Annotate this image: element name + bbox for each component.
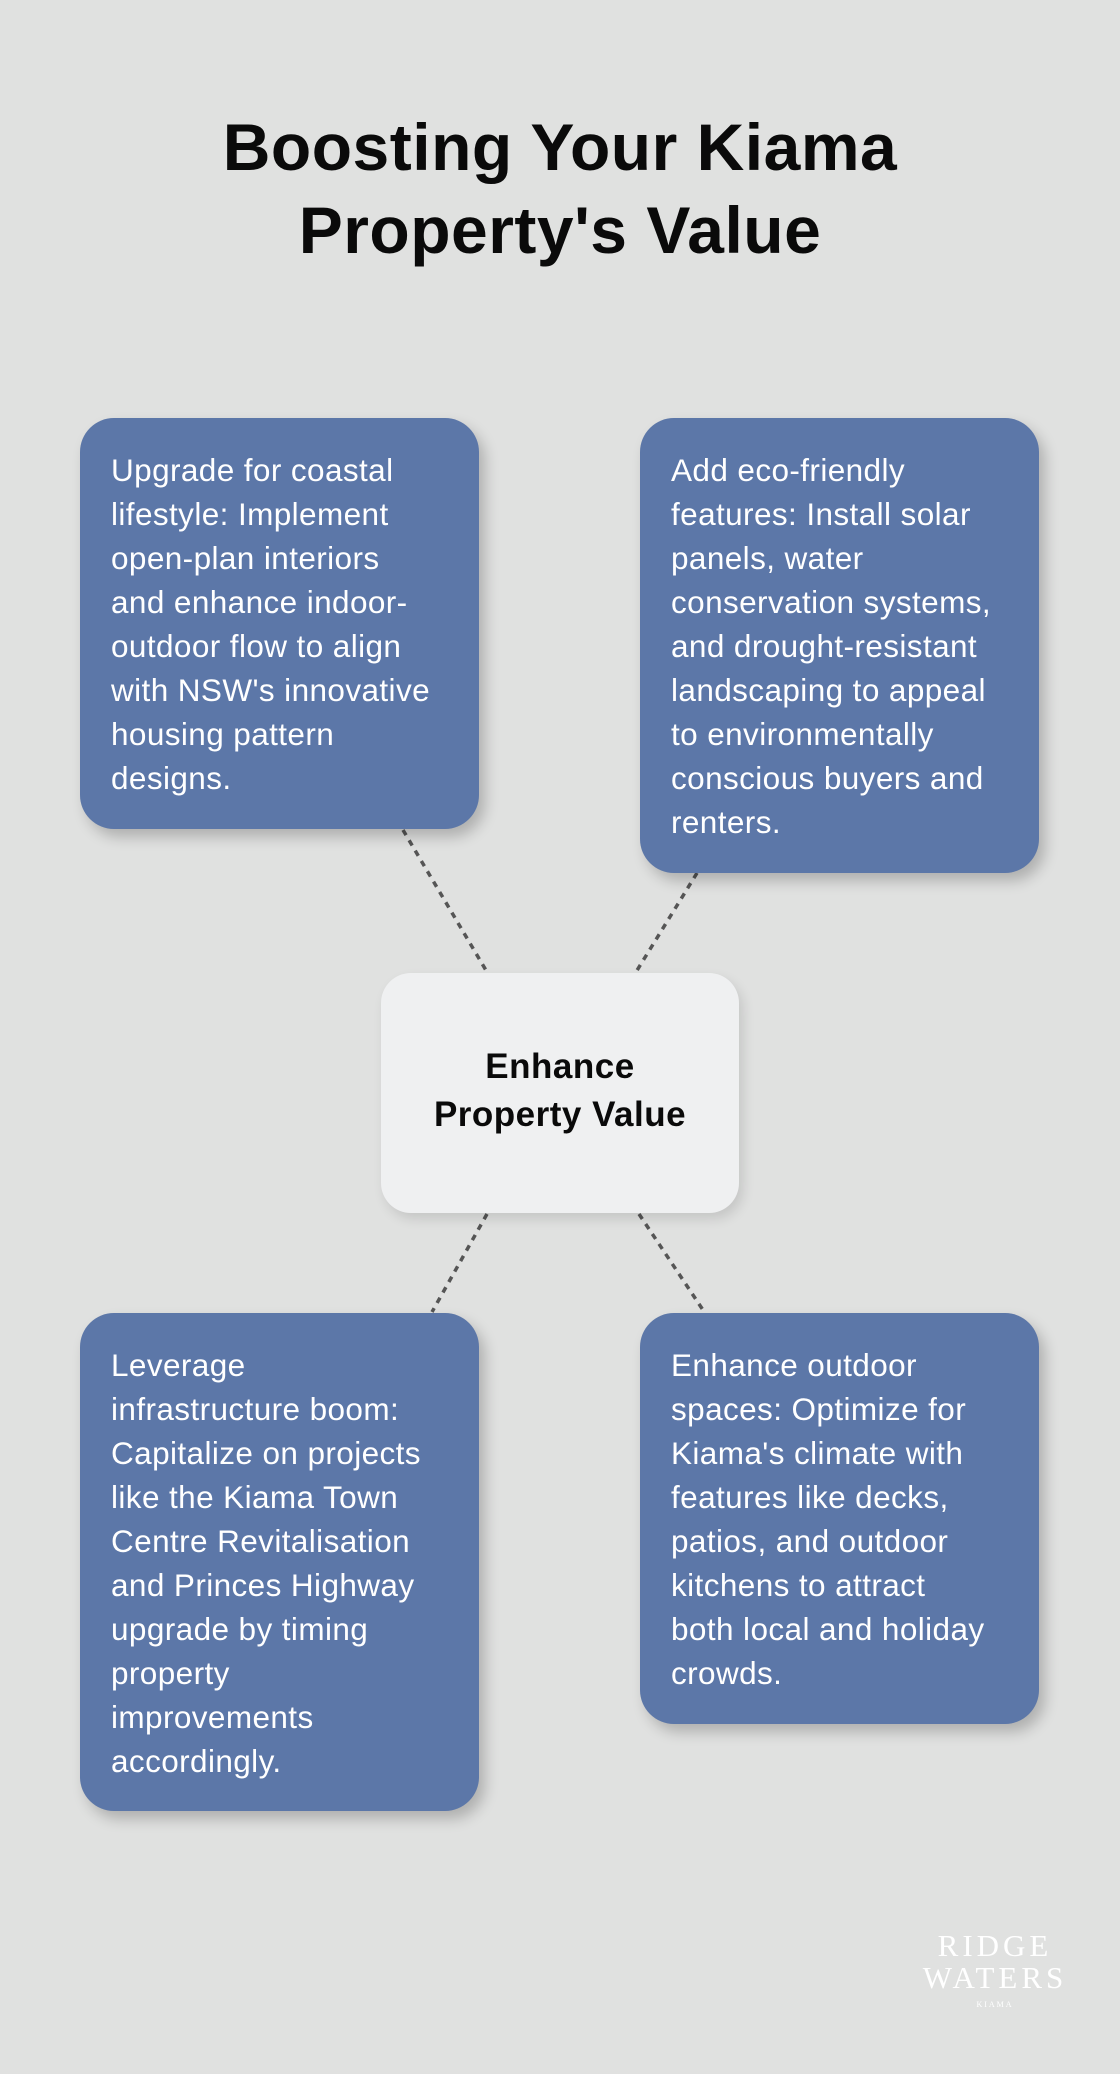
center node: Enhance: [485, 1047, 635, 1086]
logo: [922, 1928, 1067, 2009]
panel: infrastructure: like the Kiama Town: [111, 1479, 398, 1515]
panel: outdoor spaces: features like decks,: [671, 1479, 949, 1515]
panel: outdoor spaces: spaces: Optimize for: [671, 1391, 966, 1427]
logo: KIAMA: [976, 2000, 1014, 2009]
title: Property's Value: [299, 193, 821, 267]
panel: coastal lifestyle: lifestyle: Implement: [111, 496, 389, 532]
panel: infrastructure: accordingly.: [111, 1743, 282, 1779]
panel: eco-friendly: conscious buyers and: [671, 760, 984, 796]
panel: outdoor spaces: patios, and outdoor: [671, 1523, 948, 1559]
center node: [381, 973, 739, 1213]
panel: coastal lifestyle: with NSW's innovative: [111, 672, 430, 708]
center node: Property Value: [434, 1095, 686, 1134]
panel: eco-friendly: [640, 418, 1039, 873]
panel: eco-friendly: conservation systems,: [671, 584, 991, 620]
logo: RIDGE: [938, 1928, 1052, 1963]
panel: infrastructure: infrastructure boom:: [111, 1391, 399, 1427]
title: [223, 110, 898, 267]
panel: coastal lifestyle: Upgrade for coastal: [111, 452, 394, 488]
panel: outdoor spaces: [640, 1313, 1039, 1724]
panel: coastal lifestyle: [80, 418, 479, 829]
panel: infrastructure: Capitalize on projects: [111, 1435, 421, 1471]
title: Boosting Your Kiama: [223, 110, 897, 184]
panel: eco-friendly: landscaping to appeal: [671, 672, 986, 708]
panel: eco-friendly: Add eco-friendly: [671, 452, 905, 488]
panel: eco-friendly: and drought-resistant: [671, 628, 977, 664]
panel: eco-friendly: features: Install solar: [671, 496, 971, 532]
panel: infrastructure: and Princes Highway: [111, 1567, 414, 1603]
panel: coastal lifestyle: housing pattern: [111, 716, 334, 752]
panel: eco-friendly: panels, water: [671, 540, 864, 576]
panel: outdoor spaces: Kiama's climate with: [671, 1435, 963, 1471]
panel: infrastructure: Leverage: [111, 1347, 246, 1383]
panel: outdoor spaces: both local and holiday: [671, 1611, 985, 1647]
panel: infrastructure: Centre Revitalisation: [111, 1523, 410, 1559]
logo: WATERS: [923, 1960, 1067, 1995]
panel: outdoor spaces: Enhance outdoor: [671, 1347, 917, 1383]
panel: coastal lifestyle: and enhance indoor-: [111, 584, 408, 620]
panel: coastal lifestyle: designs.: [111, 760, 232, 796]
panel: outdoor spaces: kitchens to attract: [671, 1567, 925, 1603]
panel: infrastructure: [80, 1313, 479, 1811]
panel: coastal lifestyle: outdoor flow to align: [111, 628, 401, 664]
panel: coastal lifestyle: open-plan interiors: [111, 540, 380, 576]
panel: infrastructure: improvements: [111, 1699, 314, 1735]
panel: infrastructure: property: [111, 1655, 230, 1691]
panel: eco-friendly: to environmentally: [671, 716, 934, 752]
panel: eco-friendly: renters.: [671, 804, 781, 840]
panel: infrastructure: upgrade by timing: [111, 1611, 368, 1647]
panel: outdoor spaces: crowds.: [671, 1655, 782, 1691]
